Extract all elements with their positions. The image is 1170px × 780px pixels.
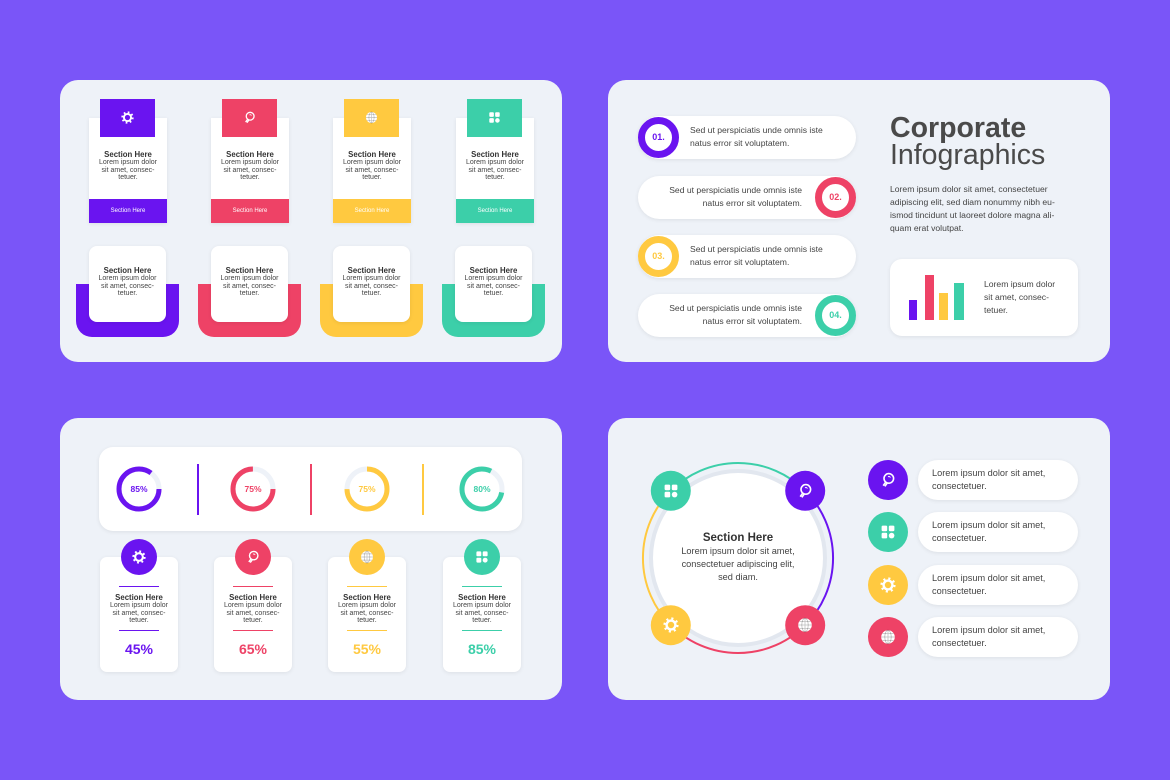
stat card 3: tetuer. [357, 617, 377, 624]
donut row card: 85% [130, 484, 148, 494]
stat card 2: tetuer. [243, 617, 263, 624]
title: Corporate [890, 112, 1026, 144]
description: quam erat volutpat. [890, 223, 964, 233]
stat card 3: Lorem ipsum dolor [338, 602, 396, 609]
stat card 3 [328, 539, 406, 674]
card 4 top: Section Here [471, 150, 519, 159]
stat card 4: sit amet, consec- [456, 610, 508, 617]
card 2 bottom [198, 246, 301, 337]
card 2 bottom: Section Here [226, 266, 273, 275]
item 04: natus error sit voluptatem. [703, 316, 802, 326]
item 03 [638, 235, 856, 278]
stat card 4: tetuer. [472, 617, 492, 624]
list item 1: consectetuer. [932, 481, 987, 491]
item 02: Sed ut perspiciatis unde omnis iste [669, 185, 802, 195]
card 3 top [332, 99, 412, 224]
item 01: natus error sit voluptatem. [690, 138, 789, 148]
stat card 4: Section Here [458, 593, 506, 602]
list item 4: Lorem ipsum dolor sit amet, [932, 625, 1045, 635]
donut row card: 75% [358, 484, 376, 494]
card 4 bottom: sit amet, consec- [467, 283, 520, 290]
center text: sed diam. [718, 572, 758, 582]
card 4 bottom: Section Here [470, 266, 517, 275]
card 1 bottom: sit amet, consec- [101, 283, 154, 290]
bar chart card: Lorem ipsum dolor [984, 279, 1055, 289]
card 3 top: Section Here [355, 208, 389, 214]
item 04: 04. [829, 310, 842, 320]
card 1 top: Section Here [104, 150, 152, 159]
center text: Lorem ipsum dolor sit amet, [681, 546, 795, 556]
card 1 top: Lorem ipsum dolor [99, 159, 157, 166]
stat card 4: Lorem ipsum dolor [453, 602, 511, 609]
item 04 [638, 294, 856, 337]
item 03: natus error sit voluptatem. [690, 257, 789, 267]
stat card 2 [214, 539, 292, 674]
item 01: 01. [652, 132, 665, 142]
item 01 [638, 116, 856, 159]
card 4 bottom: Lorem ipsum dolor [465, 275, 522, 282]
card 2 top: Section Here [226, 150, 274, 159]
center text: Section Here [703, 532, 773, 544]
title: Infographics [890, 139, 1045, 171]
card 4 top: Lorem ipsum dolor [466, 159, 524, 166]
stat card 1: sit amet, consec- [113, 610, 165, 617]
card 1 top: Section Here [111, 208, 145, 214]
list item 4: consectetuer. [932, 638, 987, 648]
card 2 bottom: sit amet, consec- [223, 283, 276, 290]
card 4 top [456, 99, 534, 224]
item 01: Sed ut perspiciatis unde omnis iste [690, 125, 823, 135]
stat card 3: Section Here [343, 593, 391, 602]
list item 3: consectetuer. [932, 586, 987, 596]
title [890, 112, 1045, 171]
card 3 bottom [320, 246, 423, 337]
description: ismod tincidunt ut laoreet dolore magna ali- [890, 210, 1054, 220]
stat card 1: Lorem ipsum dolor [110, 602, 168, 609]
card 1 top: tetuer. [118, 174, 138, 181]
card 3 bottom: Lorem ipsum dolor [343, 275, 400, 282]
card 1 bottom: Lorem ipsum dolor [99, 275, 156, 282]
center text: consectetuer adipiscing elit, [682, 559, 794, 569]
card 2 top [210, 99, 290, 224]
item 02: natus error sit voluptatem. [703, 198, 802, 208]
list item 2: Lorem ipsum dolor sit amet, [932, 520, 1045, 530]
stat card 4: 85% [468, 641, 496, 657]
card 2 bottom: Lorem ipsum dolor [221, 275, 278, 282]
list item 2 [868, 512, 1078, 554]
panel: progress [60, 418, 562, 700]
donut row card: 80% [473, 484, 491, 494]
card 3 top: Lorem ipsum dolor [343, 159, 401, 166]
card 1 bottom: Section Here [104, 266, 151, 275]
card 1 bottom: tetuer. [118, 290, 137, 297]
item 02 [638, 176, 856, 219]
description: Lorem ipsum dolor sit amet, consectetuer [890, 184, 1048, 194]
item 03: 03. [652, 251, 665, 261]
card 4 top: sit amet, consec- [469, 167, 521, 174]
stat card 1: tetuer. [129, 617, 149, 624]
item 02: 02. [829, 192, 842, 202]
card 2 top: tetuer. [240, 174, 260, 181]
card 3 top: tetuer. [362, 174, 382, 181]
panel: section cards [60, 80, 562, 362]
stat card 1: 45% [125, 641, 153, 657]
card 3 top: sit amet, consec- [346, 167, 398, 174]
card 3 bottom: sit amet, consec- [345, 283, 398, 290]
stat card 2: sit amet, consec- [227, 610, 279, 617]
card 2 top: Lorem ipsum dolor [221, 159, 279, 166]
stat card 2: Lorem ipsum dolor [224, 602, 282, 609]
list item 4 [868, 617, 1078, 658]
stat card 4 [442, 539, 522, 674]
description: adipiscing elit, sed diam nonummy nibh eu- [890, 197, 1055, 207]
list item 2: consectetuer. [932, 533, 987, 543]
card 3 bottom: Section Here [348, 266, 395, 275]
stat card 2: Section Here [229, 593, 277, 602]
card 2 top: sit amet, consec- [224, 167, 276, 174]
bar chart card: tetuer. [984, 305, 1008, 315]
list item 1: Lorem ipsum dolor sit amet, [932, 468, 1045, 478]
card 4 top: Section Here [478, 208, 512, 214]
stat card 1 [100, 539, 178, 674]
card 2 bottom: tetuer. [240, 290, 259, 297]
circle diagram [642, 462, 834, 654]
card 2 top: Section Here [233, 208, 267, 214]
item 03: Sed ut perspiciatis unde omnis iste [690, 244, 823, 254]
stat card 2: 65% [239, 641, 267, 657]
donut row card: 75% [244, 484, 262, 494]
list item 3 [868, 565, 1078, 606]
donut row card [99, 447, 522, 531]
card 4 top: tetuer. [485, 174, 505, 181]
description [890, 184, 1055, 233]
panel: numbered list and title [608, 80, 1110, 362]
card 1 bottom [76, 246, 179, 337]
list item 1 [868, 460, 1078, 502]
panel: circle diagram [608, 418, 1110, 700]
card 4 bottom: tetuer. [484, 290, 503, 297]
stat card 1: Section Here [115, 593, 163, 602]
card 1 top [88, 99, 168, 224]
center text [681, 532, 795, 582]
card 4 bottom [442, 246, 545, 337]
card 3 top: Section Here [348, 150, 396, 159]
item 04: Sed ut perspiciatis unde omnis iste [669, 303, 802, 313]
card 3 bottom: tetuer. [362, 290, 381, 297]
card 1 top: sit amet, consec- [102, 167, 154, 174]
bar chart card: sit amet, consec- [984, 292, 1049, 302]
stat card 3: 55% [353, 641, 381, 657]
stat card 3: sit amet, consec- [341, 610, 393, 617]
bar chart card [890, 259, 1078, 336]
list item 3: Lorem ipsum dolor sit amet, [932, 573, 1045, 583]
